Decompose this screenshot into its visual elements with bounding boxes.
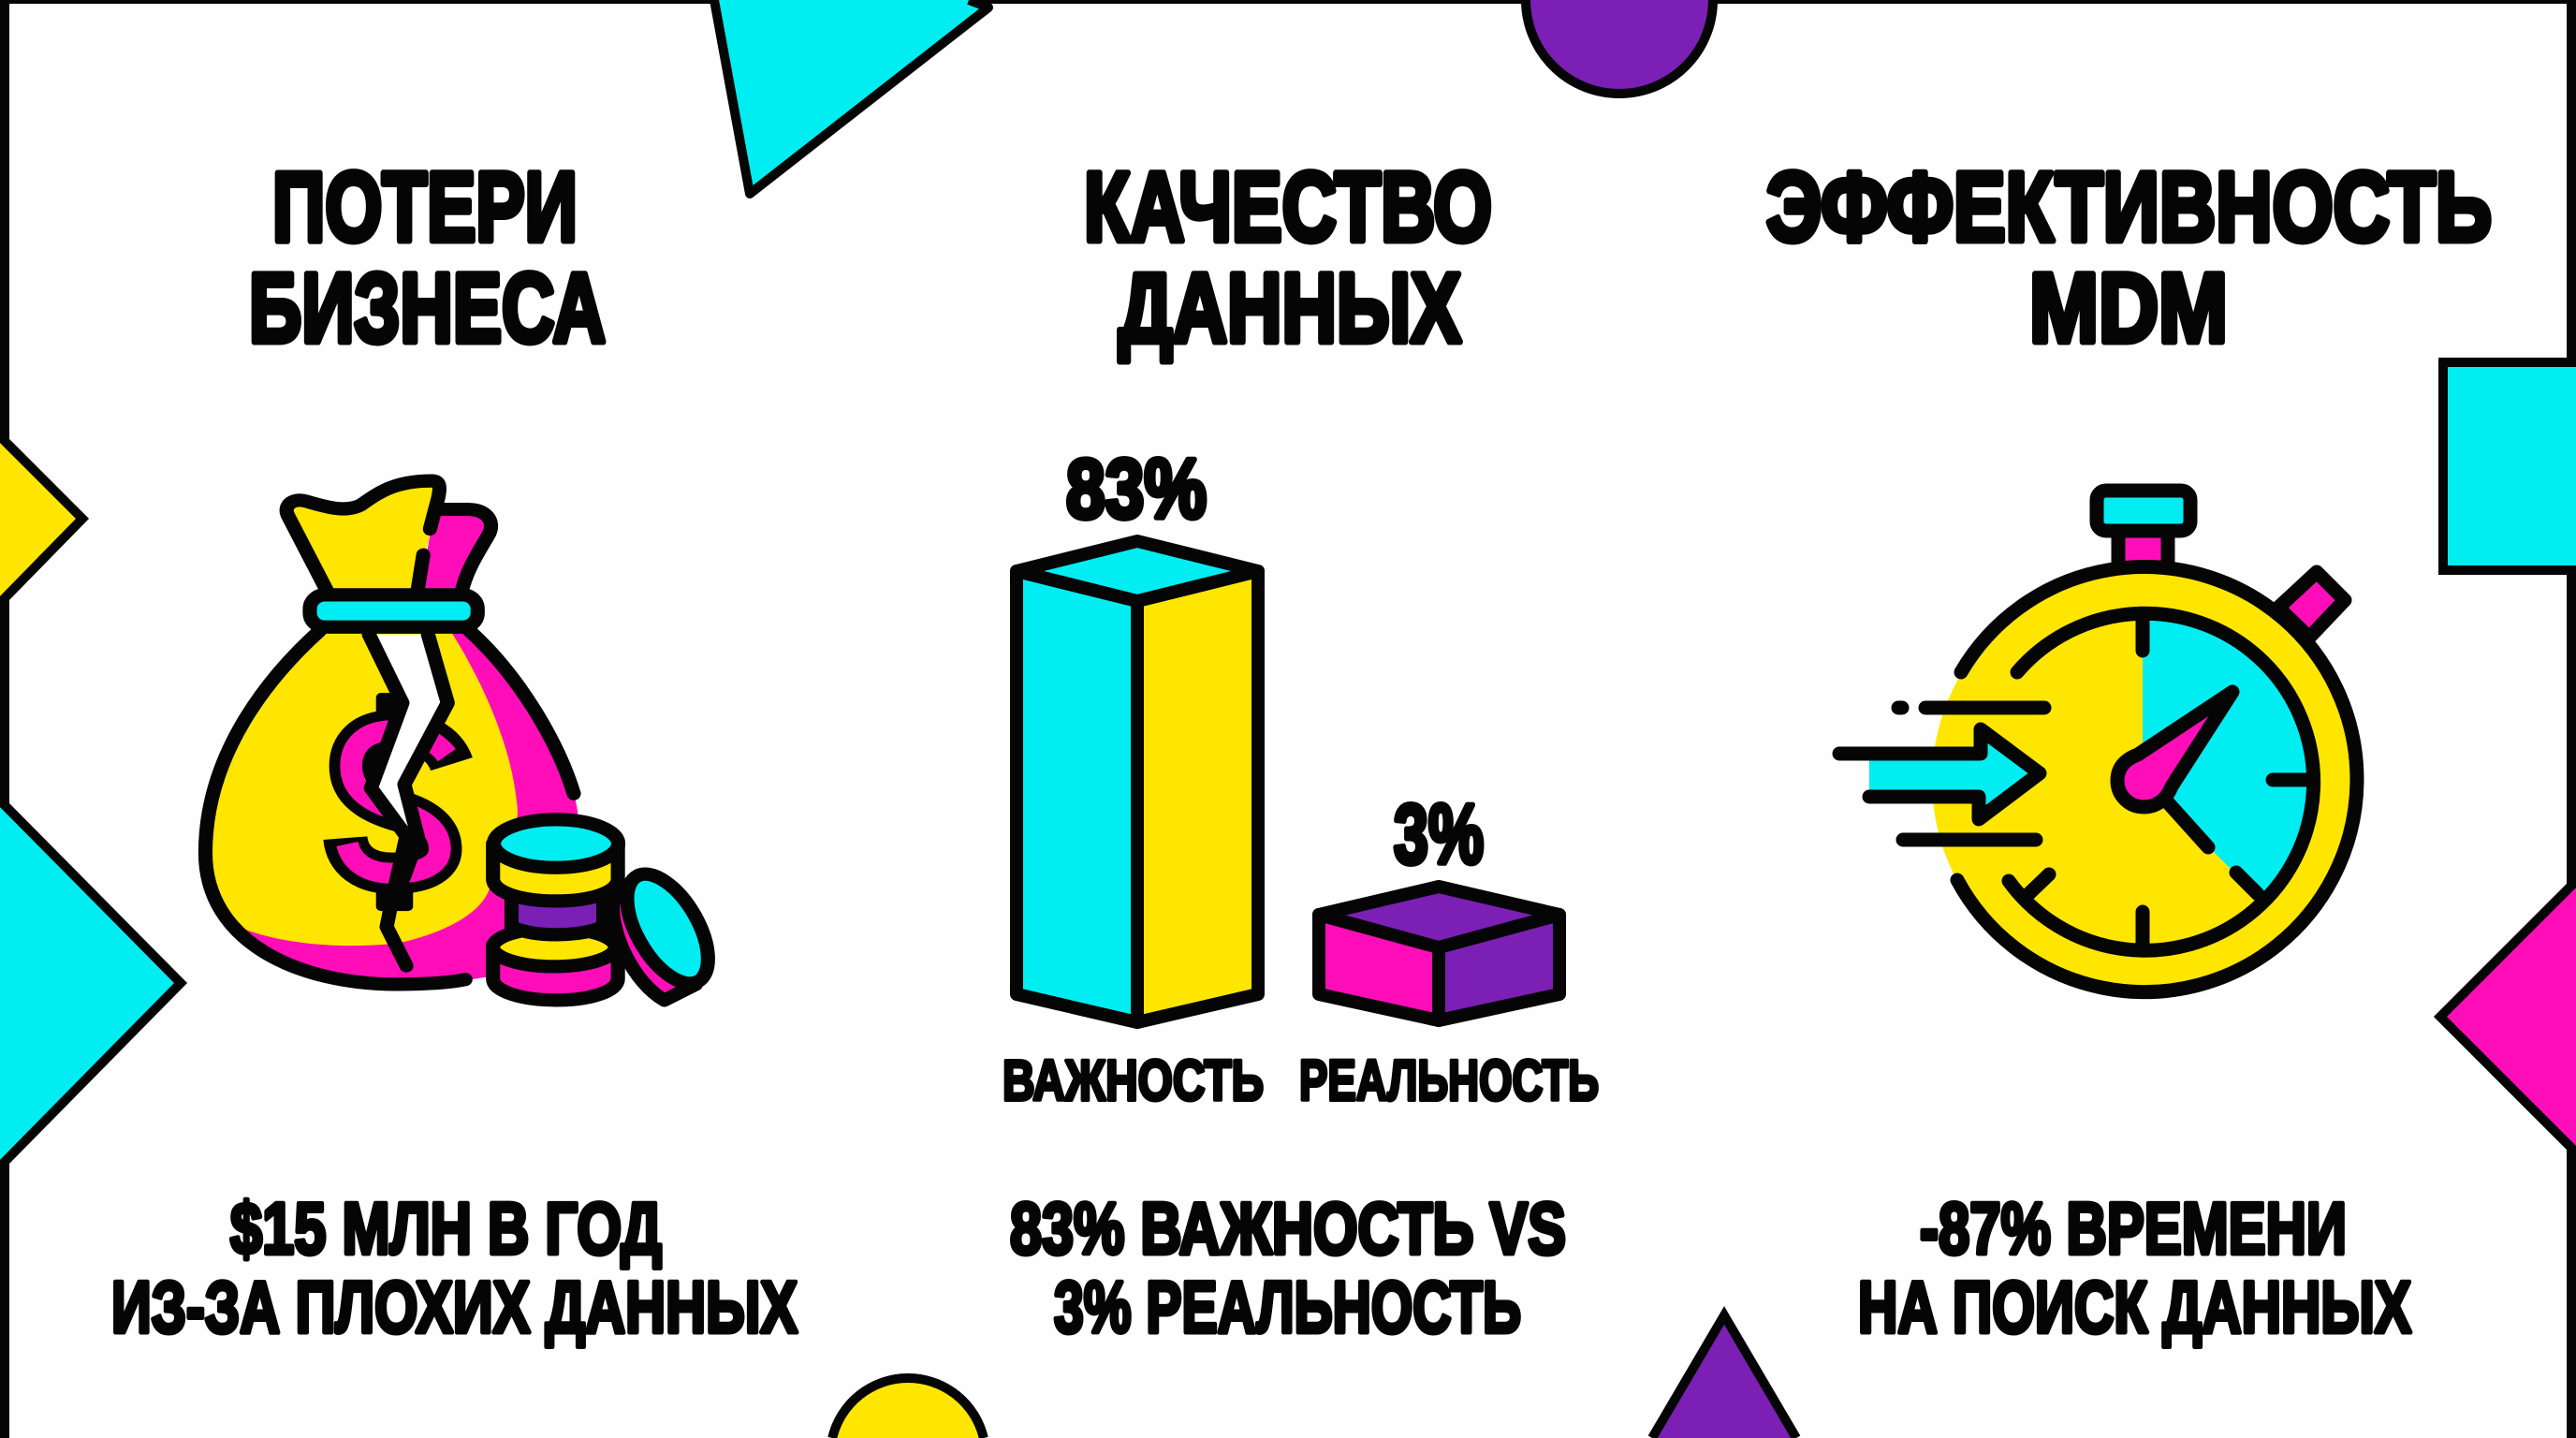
caption: data quality: 3% РЕАЛЬНОСТЬ (1054, 1266, 1521, 1348)
caption: business losses (111, 1187, 798, 1348)
decorative shape: purple circle top (1526, 0, 1713, 94)
decorative shape: magenta diamond right (2440, 881, 2576, 1152)
caption: MDM efficiency: -87% ВРЕМЕНИ (1920, 1187, 2347, 1269)
decorative shape: cyan triangle top (714, 0, 988, 194)
bag body magenta (205, 631, 578, 984)
heading: MDM efficiency: MDM (2029, 254, 2228, 363)
top crown (2118, 530, 2168, 571)
bag top yellow (286, 481, 439, 594)
axis label importance: ВАЖНОСТЬ (1003, 1049, 1264, 1112)
heading: MDM efficiency (1766, 153, 2492, 363)
coin stack (493, 946, 618, 1000)
caption: data quality: 83% ВАЖНОСТЬ VS (1010, 1187, 1566, 1269)
heading: business losses: ПОТЕРИ (272, 153, 578, 262)
outer ring (1957, 567, 2357, 992)
axis label reality: РЕАЛЬНОСТЬ (1299, 1049, 1599, 1112)
icon: stopwatch with speed arrow (1839, 491, 2357, 992)
bag back ear magenta (420, 509, 491, 594)
bag outline (205, 631, 574, 984)
dollar sign (381, 697, 408, 906)
bag tie band (310, 594, 477, 627)
heading: business losses (249, 153, 606, 363)
clock hand (2117, 692, 2232, 807)
speed lines (1898, 708, 2044, 840)
dial ticks (2027, 620, 2305, 943)
decorative shape: cyan square right (2443, 362, 2576, 570)
inner dial (2009, 613, 2314, 950)
bar chart: importance vs reality (1003, 443, 1599, 1112)
heading: business losses: БИЗНЕСА (249, 254, 606, 363)
value label 3%: 3% (1394, 788, 1484, 882)
decorative shape: yellow diamond left (0, 436, 82, 603)
caption: business losses: ИЗ-ЗА ПЛОХИХ ДАННЫХ (111, 1266, 798, 1348)
cyan sector (2143, 612, 2310, 900)
tall bar importance (1017, 541, 1258, 1022)
decorative shape: cyan diamond left (0, 800, 181, 1167)
caption: business losses: $15 МЛН В ГОД (230, 1187, 662, 1269)
short bar reality (1319, 887, 1559, 1020)
watch body fill (1932, 570, 2353, 991)
heading: data quality (1084, 153, 1492, 363)
caption: MDM efficiency: НА ПОИСК ДАННЫХ (1858, 1266, 2411, 1348)
side button (2278, 572, 2345, 638)
caption: data quality (1010, 1187, 1566, 1348)
heading: data quality: КАЧЕСТВО (1084, 153, 1492, 262)
value label 83%: 83% (1066, 443, 1207, 536)
crack (369, 635, 447, 897)
icon: money bag with crack and coins (205, 481, 724, 1000)
decorative shape: purple triangle bottom (1652, 1315, 1796, 1438)
bag body yellow (205, 631, 518, 946)
caption: MDM efficiency (1858, 1187, 2411, 1348)
tilted coin (613, 875, 695, 1000)
decorative shape: yellow circle bottom (832, 1378, 984, 1438)
heading: data quality: ДАННЫХ (1119, 254, 1461, 363)
speed arrow (1869, 729, 2040, 819)
